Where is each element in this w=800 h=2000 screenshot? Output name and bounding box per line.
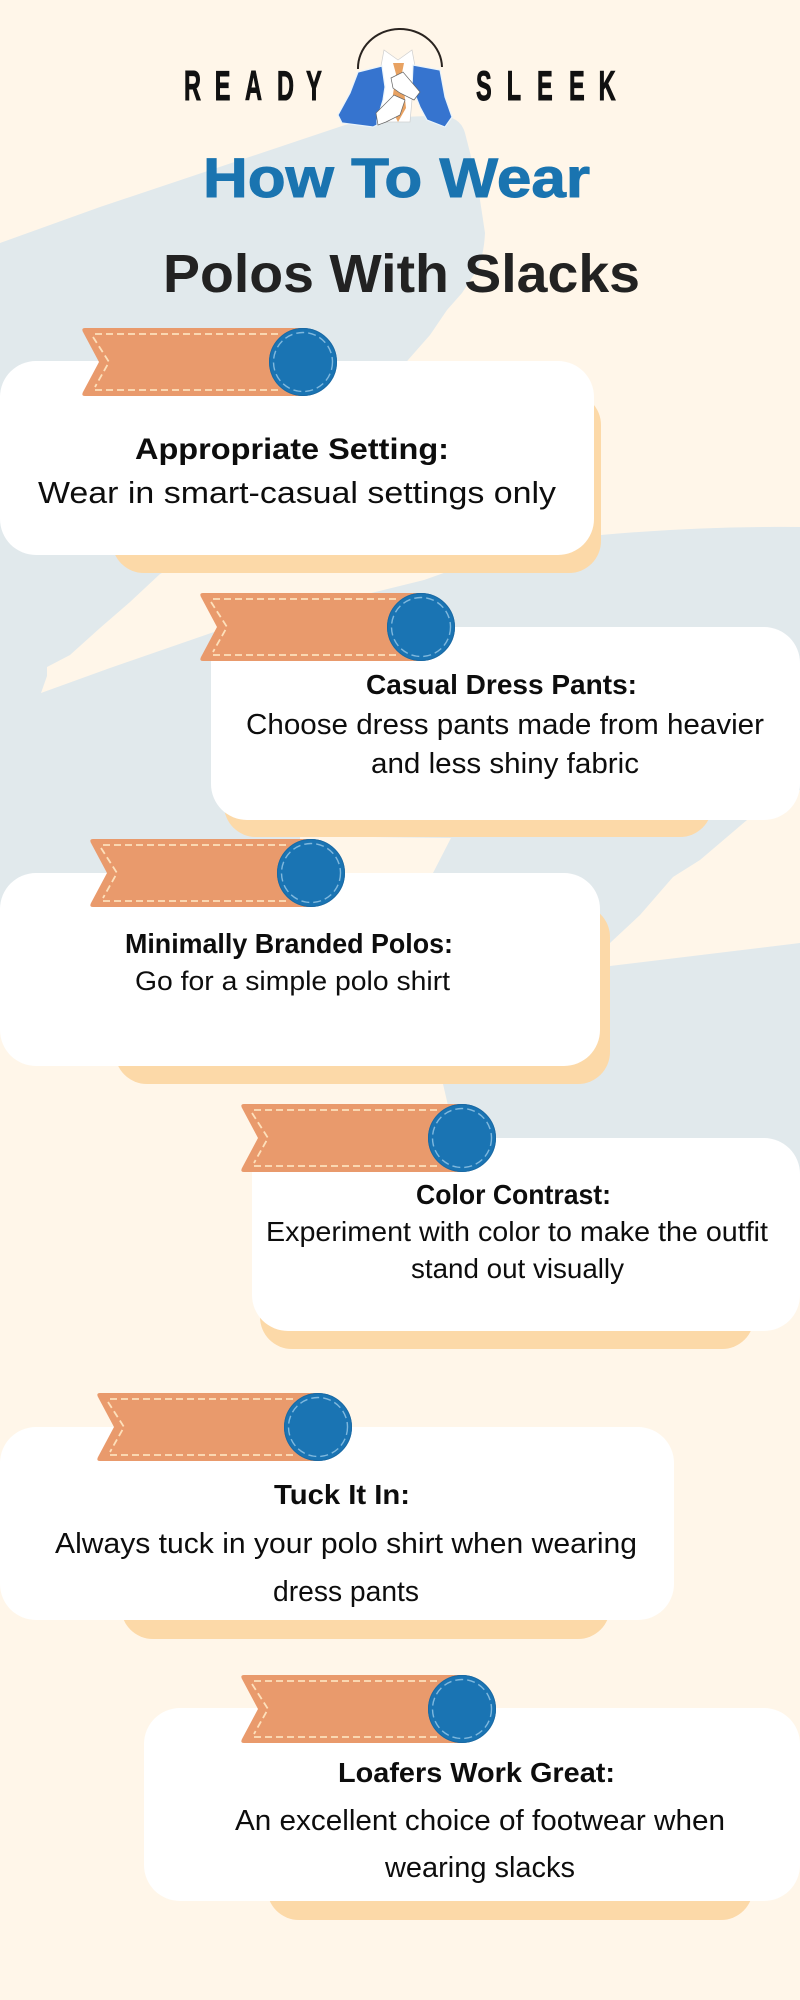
icon: man in blue suit adjusting tie (338, 29, 452, 127)
ribbon badge (97, 1393, 352, 1461)
panel: color contrast (241, 1104, 800, 1349)
card (144, 1708, 800, 1901)
card (252, 1138, 800, 1331)
body text (235, 1805, 725, 1884)
body text: Always tuck in your polo shirt when wearing (55, 1528, 637, 1560)
panel: loafers work great (144, 1675, 800, 1920)
body text (55, 1528, 637, 1608)
heading: Appropriate Setting: (135, 433, 449, 466)
panel: casual dress pants (200, 593, 800, 837)
body text: Choose dress pants made from heavier (246, 709, 764, 741)
card shadow (112, 393, 601, 573)
card shadow (267, 1740, 753, 1920)
heading: Color Contrast: (416, 1179, 611, 1210)
body text: Wear in smart-casual settings only (38, 475, 557, 510)
heading: Minimally Branded Polos: (125, 928, 453, 959)
heading: Casual Dress Pants: (366, 669, 637, 700)
card (0, 361, 594, 555)
ribbon badge (200, 593, 455, 661)
body text: wearing slacks (384, 1852, 575, 1884)
card (0, 873, 600, 1066)
card shadow (121, 1460, 610, 1639)
ribbon badge (241, 1104, 496, 1172)
title line 2: Polos With Slacks (163, 244, 640, 304)
body text: Go for a simple polo shirt (135, 966, 451, 996)
background shape: upper blue brush stroke (0, 116, 800, 1000)
body text: stand out visually (411, 1253, 624, 1284)
body text: dress pants (273, 1576, 419, 1608)
logo wordmark: SLEEK: SLEEK (476, 63, 616, 110)
heading: Loafers Work Great: (338, 1757, 615, 1788)
heading: Tuck It In: (274, 1479, 410, 1510)
panel: minimally branded polos (0, 839, 610, 1084)
title line 1: How To Wear (203, 146, 590, 209)
card shadow (115, 905, 610, 1084)
body text: An excellent choice of footwear when (235, 1805, 725, 1837)
body text (266, 1216, 768, 1284)
card shadow (224, 660, 712, 837)
panel: appropriate setting (0, 328, 601, 573)
card shadow (260, 1170, 754, 1349)
body text: Experiment with color to make the outfit (266, 1216, 768, 1247)
ribbon badge (241, 1675, 496, 1743)
card (0, 1427, 674, 1620)
card (211, 627, 800, 820)
panel: tuck it in (0, 1393, 674, 1639)
background shape: lower blue brush stroke (443, 943, 800, 1200)
logo wordmark: READY: READY (184, 63, 322, 110)
ribbon badge (82, 328, 337, 396)
logo: Ready Sleek (184, 29, 616, 127)
body text (246, 709, 764, 780)
ribbon badge (90, 839, 345, 907)
body text: and less shiny fabric (371, 748, 639, 780)
